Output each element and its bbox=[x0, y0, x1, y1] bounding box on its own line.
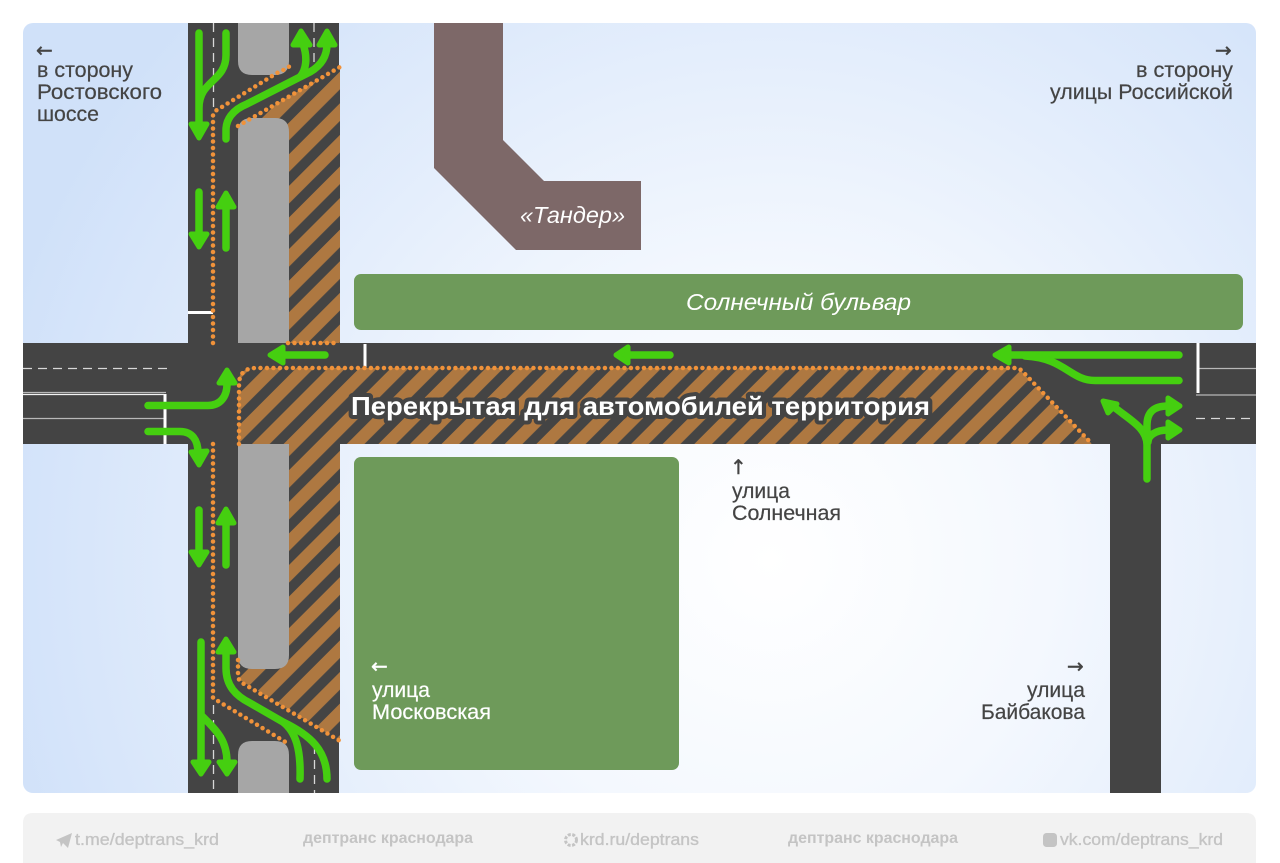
label: в сторону улицы Российской: в сторону bbox=[1136, 59, 1234, 82]
building: Тандер: «Тандер» bbox=[520, 202, 625, 228]
label: в сторону Ростовского шоссе bbox=[36, 46, 162, 122]
label: в сторону Ростовского шоссе: Ростовского bbox=[37, 81, 162, 104]
label: в сторону Ростовского шоссе: в сторону bbox=[37, 59, 134, 82]
closed area hatching bbox=[238, 67, 1092, 741]
traffic arrows bbox=[148, 31, 1180, 779]
arrows: intersection west bbox=[148, 347, 325, 465]
heading: closed area: Перекрытая для автомобилей территория bbox=[351, 391, 930, 421]
label: улица Московская: улица bbox=[372, 679, 430, 702]
label: в сторону улицы Российской: → bbox=[1215, 38, 1232, 62]
label: улица Байбакова: улица bbox=[1027, 679, 1085, 702]
label: улица Московская: Московская bbox=[372, 701, 491, 724]
park: Солнечный бульвар: Солнечный бульвар bbox=[686, 289, 911, 315]
footer: brand name repeat: дептранс краснодара bbox=[788, 830, 958, 847]
label: в сторону улицы Российской: улицы Российской bbox=[1050, 81, 1233, 104]
label: в сторону улицы Российской bbox=[1050, 46, 1233, 104]
label: улица Солнечная: Солнечная bbox=[732, 502, 841, 525]
building: Тандер bbox=[434, 23, 641, 250]
label: в сторону Ростовского шоссе: шоссе bbox=[37, 103, 99, 126]
footer bar bbox=[23, 813, 1256, 863]
arrows: south section bbox=[191, 509, 327, 779]
label: улица Московская: ← bbox=[371, 654, 388, 678]
label: улица Байбакова: Байбакова bbox=[981, 701, 1085, 724]
label: улица Солнечная bbox=[732, 459, 840, 520]
arrows: east side bbox=[995, 347, 1180, 479]
label: улица Солнечная: улица bbox=[732, 480, 790, 503]
label: улица Байбакова: → bbox=[1067, 654, 1084, 678]
tram medians bbox=[238, 23, 289, 793]
dotted boundaries of closed area bbox=[213, 66, 1092, 743]
arrow: Солнечный бульвар bbox=[616, 347, 670, 363]
footer: telegram link: t.me/deptrans_krd bbox=[75, 830, 219, 849]
label: в сторону Ростовского шоссе: ← bbox=[36, 38, 53, 62]
park: Солнечный бульвар bbox=[354, 274, 1243, 330]
label: улица Байбакова bbox=[982, 662, 1086, 720]
footer: brand name: дептранс краснодара bbox=[303, 830, 473, 847]
label: улица Солнечная: ↑ bbox=[730, 455, 747, 479]
park: square by улица Московская bbox=[354, 457, 679, 770]
label: улица Московская bbox=[372, 662, 490, 720]
footer: site link: krd.ru/deptrans bbox=[580, 830, 699, 849]
arrows: northwest lanes bbox=[191, 31, 335, 248]
footer: vk link: vk.com/deptrans_krd bbox=[1060, 830, 1223, 849]
